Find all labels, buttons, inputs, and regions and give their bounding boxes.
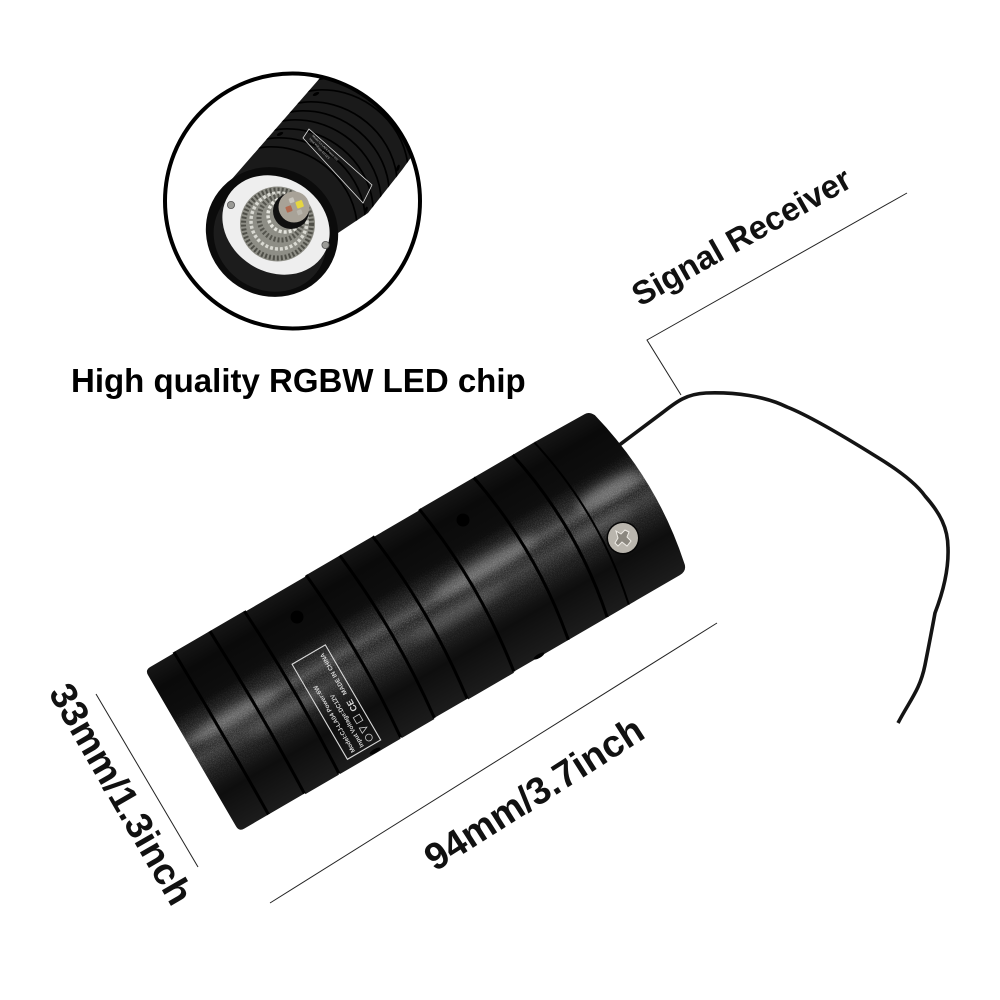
close-up: mounting screws <box>227 201 329 249</box>
inset: circular close-up of the LED chip <box>163 72 422 330</box>
printed product label: Model:CJ-LA04 Power:6W <box>312 684 357 754</box>
leader line: signal receiver <box>647 193 907 395</box>
circle frame <box>165 74 420 328</box>
close-up: product label: Model:CJ-LA04 Power:6W <box>311 134 339 162</box>
close-up: holes <box>276 91 401 214</box>
close-up: faceted reflector <box>240 186 315 262</box>
caption: High quality RGBW LED chip: High quality RGBW LED chip <box>71 362 526 399</box>
printed product label: Input Voltage:DC12V <box>329 692 366 749</box>
mounting holes on body <box>290 514 545 756</box>
dimension line: length <box>270 623 717 903</box>
signal receiver wire <box>618 393 948 723</box>
close-up: front face with white plate <box>181 142 363 322</box>
label: Signal Receiver: Signal Receiver <box>625 160 858 313</box>
screw <box>606 522 640 554</box>
rib segments <box>144 403 696 832</box>
metallic highlight band <box>175 458 664 782</box>
printed product label: MADE IN CHINA <box>319 651 349 696</box>
close-up: RGBW LED emitter <box>273 192 310 229</box>
dimension label: 33mm/1.3inch: 33mm/1.3inch <box>41 676 201 912</box>
close-up: product label <box>303 129 372 203</box>
grooves between ribs <box>174 437 638 815</box>
close-up: product label: Input Voltage:DC12V <box>308 137 331 160</box>
dimension line: diameter <box>96 694 198 867</box>
product: ribbed black cylinder <box>144 398 706 832</box>
close-up: cylinder body <box>232 78 410 233</box>
printed product label: CE <box>344 698 359 713</box>
dimension label: 94mm/3.7inch: 94mm/3.7inch <box>417 709 652 880</box>
printed product label <box>292 645 381 759</box>
cylinder core <box>149 409 690 828</box>
